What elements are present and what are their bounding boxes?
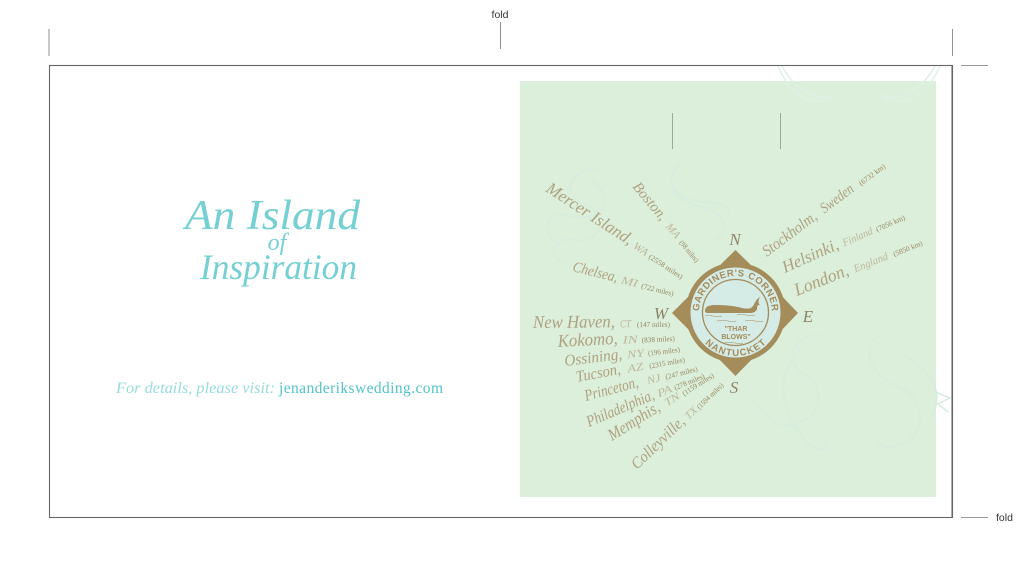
label: Ossining: NY	[625, 347, 647, 361]
label: Memphis: TN	[662, 390, 683, 409]
label: Memphis: Memphis,	[603, 398, 663, 445]
title: An Island	[182, 193, 361, 239]
label: London: England	[851, 250, 890, 276]
label: Mercer Island: (2558 miles)	[647, 252, 685, 281]
compass points	[672, 250, 798, 376]
label: Ossining	[563, 339, 681, 370]
label: Boston	[629, 179, 705, 266]
label: Princeton: (247 miles)	[664, 364, 699, 381]
label: Kokomo	[556, 325, 676, 351]
label: Princeton	[582, 358, 700, 405]
label: Memphis: (1159 miles)	[680, 371, 716, 398]
label: Ossining: Ossining,	[563, 346, 623, 370]
label: Mercer Island: Mercer Island,	[542, 178, 637, 249]
label: Tucson: AZ	[625, 361, 645, 376]
title: Inspiration	[199, 247, 357, 287]
label: Stockholm	[759, 157, 889, 260]
compass emblem	[672, 250, 798, 376]
label: Colleyville: (1594 miles)	[695, 381, 726, 411]
inner circle	[702, 280, 768, 346]
ring text: Nantucket: NANTUCKET	[705, 338, 764, 356]
ring text: Gardiner's Corner: GARDINER'S CORNER	[692, 270, 778, 311]
label: London	[790, 230, 925, 300]
details line: jenanderikswedding.com	[278, 380, 443, 397]
label: Kokomo: IN	[621, 334, 639, 347]
label: London: (5850 km)	[892, 238, 924, 259]
label: Kokomo: (838 miles)	[642, 334, 675, 345]
title	[182, 193, 361, 287]
label: Princeton: NJ	[644, 372, 663, 388]
panel: green map background	[520, 81, 936, 497]
label: Philadelphia: Philadelphia,	[583, 387, 657, 431]
motto: BLOWS"	[721, 334, 751, 341]
label: New Haven: (147 miles)	[637, 320, 670, 329]
ornaments: faint flourishes	[547, 66, 950, 449]
label: London: London,	[790, 260, 851, 300]
label: Philadelphia	[583, 366, 707, 431]
label: Stockholm: Sweden	[817, 181, 857, 217]
label: Boston: Boston,	[629, 179, 670, 224]
compass letters: S	[730, 378, 739, 397]
label: Philadelphia: (278 miles)	[673, 371, 706, 392]
label: Boston: MA	[662, 220, 683, 241]
compass ring	[688, 265, 783, 360]
label: Princeton: Princeton,	[582, 374, 640, 405]
label: Chelsea: MI	[619, 274, 641, 291]
label: Mercer Island	[542, 178, 689, 283]
title: of	[268, 230, 290, 256]
city labels: east	[759, 157, 925, 300]
details line: For details, please visit:	[115, 380, 275, 397]
label: New Haven: CT	[620, 318, 632, 330]
panel marks	[672, 113, 780, 149]
details line	[115, 380, 443, 397]
label: Kokomo: Kokomo,	[556, 328, 618, 351]
compass letters: N	[728, 230, 742, 249]
compass letters: E	[802, 307, 814, 326]
compass letters: W	[654, 304, 670, 323]
label: Tucson: (2315 miles)	[648, 355, 686, 370]
label: Ossining: (196 miles)	[648, 345, 681, 358]
label: Colleyville	[628, 376, 727, 473]
fold marks: fold	[996, 512, 1013, 524]
label: Chelsea: Chelsea,	[571, 259, 620, 286]
label: Tucson: Tucson,	[575, 361, 622, 386]
fold marks: fold	[492, 9, 509, 21]
label: Philadelphia: PA	[654, 383, 674, 401]
label: Helsinki	[778, 205, 908, 277]
crop frame	[50, 66, 952, 518]
label: Tucson	[575, 349, 686, 386]
label: Stockholm: (6732 km)	[857, 161, 888, 188]
label: Boston: (98 miles)	[677, 238, 701, 264]
compass letters	[654, 230, 814, 397]
label: Colleyville: TX	[683, 404, 701, 422]
label: New Haven	[532, 311, 671, 332]
motto: "THAR	[725, 326, 747, 333]
label: Memphis	[603, 364, 717, 445]
label: Mercer Island: WA	[631, 240, 651, 259]
motto	[721, 326, 751, 341]
label: Helsinki: Finland	[840, 225, 875, 250]
label: New Haven: New Haven,	[532, 311, 615, 332]
label: Helsinki: (7056 km)	[874, 213, 907, 234]
label: Colleyville: Colleyville,	[628, 413, 689, 473]
whale	[705, 297, 760, 313]
city labels: west and north	[532, 178, 727, 473]
label: Chelsea	[571, 259, 676, 300]
label: Chelsea: (722 miles)	[640, 281, 675, 298]
label: Stockholm: Stockholm,	[759, 208, 821, 260]
label: Helsinki: Helsinki,	[778, 235, 841, 277]
waves	[705, 314, 763, 344]
